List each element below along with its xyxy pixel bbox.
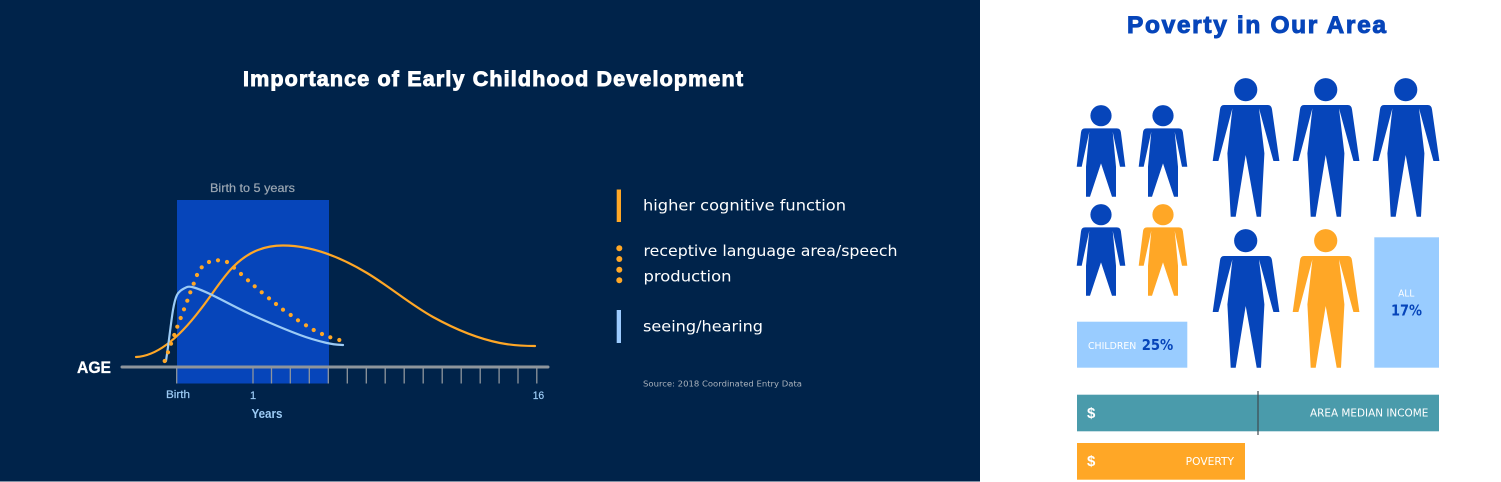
tick label: 16: 16 <box>533 390 544 402</box>
child icon 2 <box>1139 105 1187 197</box>
legend item: receptive language: receptive language area/speech <box>644 242 898 260</box>
heading: poverty: Poverty in Our Area <box>1127 12 1386 39</box>
curve: higher cognitive function <box>136 246 535 357</box>
legend <box>616 190 898 343</box>
band label: Birth to 5 years <box>210 181 295 195</box>
stat box: all 17%: 17% <box>1391 302 1422 320</box>
child icon 1 <box>1077 105 1125 197</box>
child icon 4: in poverty <box>1139 204 1187 296</box>
source note: Source: 2018 Coordinated Entry Data <box>643 380 802 389</box>
curve: receptive language dots <box>163 258 341 363</box>
panel: early childhood development <box>0 0 980 482</box>
bar: poverty <box>1077 443 1245 480</box>
stat box: children 25%: CHILDREN <box>1088 341 1136 352</box>
stat box: children 25%: 25% <box>1142 336 1173 354</box>
heading: early childhood: Importance of Early Childhood Development <box>243 67 743 91</box>
legend item: receptive language <box>616 242 898 286</box>
legend item: receptive language: production <box>644 268 732 286</box>
pictogram: all people <box>1213 78 1439 368</box>
tick label: 1: 1 <box>250 390 256 402</box>
panel: poverty in our area <box>1077 12 1439 480</box>
bar: area median income: AREA MEDIAN INCOME <box>1310 408 1428 420</box>
legend item: higher cognitive function: higher cognitive function <box>643 197 846 215</box>
bar: area median income <box>1077 391 1439 435</box>
stat box: all 17% <box>1374 237 1439 368</box>
adult icon 1 <box>1213 78 1279 217</box>
adult icon 3 <box>1373 78 1439 217</box>
stat box: all 17%: ALL <box>1398 288 1415 299</box>
stat box: children 25% <box>1077 322 1187 368</box>
child icon 3 <box>1077 204 1125 296</box>
axis title: years: Years <box>252 407 283 421</box>
adult icon 2 <box>1293 78 1359 217</box>
bar: area median income: $ <box>1087 405 1096 422</box>
curve: seeing and hearing <box>166 287 343 361</box>
axis title: age: AGE <box>77 359 111 377</box>
tick label: birth: Birth <box>166 389 190 401</box>
legend item: seeing and hearing <box>617 310 763 343</box>
legend item: higher cognitive function <box>617 190 846 222</box>
age axis <box>122 367 548 384</box>
chart band: birth to 5 years <box>177 200 329 384</box>
adult icon 4 <box>1213 229 1279 368</box>
chart: development curves <box>77 181 548 421</box>
bar: poverty: $ <box>1087 453 1096 470</box>
adult icon 5: in poverty <box>1293 229 1359 368</box>
bar: poverty: POVERTY <box>1186 456 1235 468</box>
pictogram: children <box>1077 105 1187 296</box>
legend item: seeing and hearing: seeing/hearing <box>643 318 763 336</box>
